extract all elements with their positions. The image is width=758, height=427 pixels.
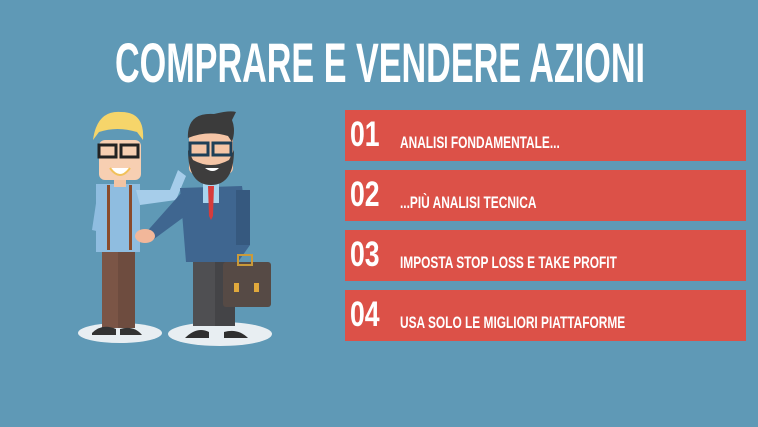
right man	[135, 111, 271, 338]
item 01: 01	[350, 115, 380, 154]
item 03	[345, 230, 746, 281]
item 04	[345, 290, 746, 341]
item 03: IMPOSTA STOP LOSS E TAKE PROFIT	[400, 253, 617, 272]
item 04: USA SOLO LE MIGLIORI PIATTAFORME	[400, 313, 625, 332]
left man	[92, 112, 186, 335]
item 02	[345, 170, 746, 221]
item 02: ...PIÙ ANALISI TECNICA	[400, 193, 536, 212]
shadows	[78, 322, 272, 346]
item 04: 04	[350, 295, 380, 334]
item 01: ANALISI FONDAMENTALE...	[400, 133, 560, 152]
item 01	[345, 110, 746, 161]
item 03: 03	[350, 235, 380, 274]
illustration: handshake	[78, 111, 272, 346]
item 02: 02	[350, 175, 380, 214]
